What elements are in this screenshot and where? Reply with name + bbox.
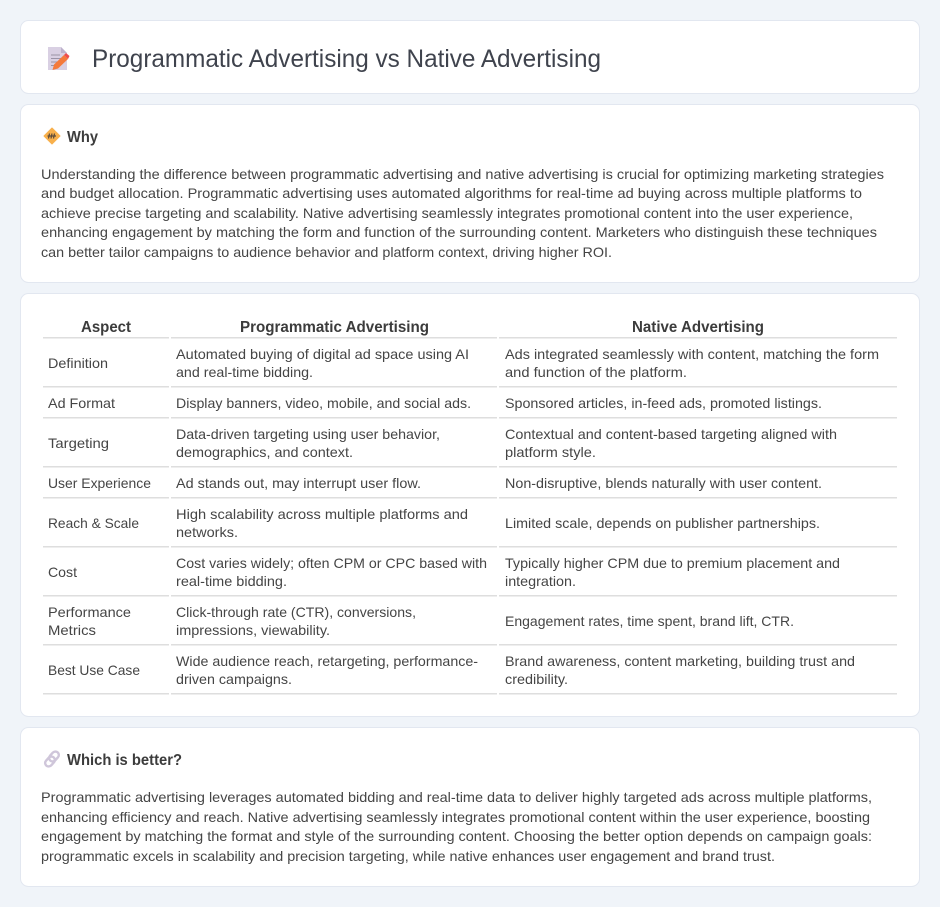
row: definition: Ads integrated seamlessly with content, matching the form [505, 346, 879, 362]
row: cost: Cost [48, 564, 77, 580]
row: user experience: User Experience [48, 475, 151, 491]
text block: why [41, 166, 884, 260]
row: ad format [43, 395, 897, 418]
row: performance metrics: Engagement rates, time spent, brand lift, CTR. [505, 613, 794, 629]
row: best use case: credibility. [505, 671, 568, 687]
row: performance metrics: Metrics [48, 622, 96, 638]
row: targeting [43, 426, 897, 468]
icon: link [44, 750, 60, 768]
heading: which is better: Which is better? [67, 752, 182, 769]
text block: which is better: engagement by matching the format and style of the surrounding content. Choosing the better option depends on campaign goals: [41, 828, 872, 844]
table header: Programmatic Advertising [240, 319, 429, 336]
text block: which is better: programmatic excels in scalability and precision targeting, while native enhances user engagement and brand trust. [41, 848, 775, 864]
panel: why [20, 104, 920, 282]
text block: why: Understanding the difference between programmatic advertising and native advertising is crucial for optimizing marketing strategies [41, 166, 884, 182]
icon: document with pencil [48, 47, 70, 70]
row: targeting: Data-driven targeting using user behavior, [176, 426, 440, 442]
panel: title [20, 20, 920, 94]
heading: why: Why [67, 129, 98, 146]
row: reach and scale: Reach & Scale [48, 515, 139, 531]
row: best use case: Brand awareness, content marketing, building trust and [505, 653, 855, 669]
row: user experience: Non-disruptive, blends naturally with user content. [505, 475, 822, 491]
text block: why: and budget allocation. Programmatic advertising uses automated algorithms for real-time ad buying across multiple platforms to [41, 185, 862, 201]
table header: Aspect [81, 319, 132, 336]
row: reach and scale: networks. [176, 524, 238, 540]
row: ad format: Display banners, video, mobile, and social ads. [176, 395, 471, 411]
row: cost [43, 555, 897, 596]
row: ad format: Ad Format [48, 395, 115, 411]
row: cost: Typically higher CPM due to premium placement and [505, 555, 840, 571]
row: best use case: driven campaigns. [176, 671, 292, 687]
row: reach and scale: Limited scale, depends on publisher partnerships. [505, 515, 820, 531]
row: performance metrics [43, 604, 897, 646]
row: cost: Cost varies widely; often CPM or CPC based with [176, 555, 487, 571]
row: definition: and function of the platform. [505, 364, 687, 380]
row: definition: Definition [48, 355, 108, 371]
row: reach and scale [43, 506, 897, 548]
title text: Programmatic Advertising vs Native Advertising [92, 45, 601, 73]
table header [43, 319, 897, 338]
row: targeting: Targeting [48, 435, 109, 451]
text block: which is better [41, 789, 872, 864]
row: ad format: Sponsored articles, in-feed ads, promoted listings. [505, 395, 822, 411]
row: targeting: demographics, and context. [176, 444, 353, 460]
panel: which is better [20, 728, 920, 886]
row: performance metrics: Performance [48, 604, 131, 620]
row: best use case: Best Use Case [48, 662, 140, 678]
row: cost: integration. [505, 573, 576, 589]
row: cost: real-time bidding. [176, 573, 287, 589]
row: performance metrics: impressions, viewability. [176, 622, 330, 638]
text block: why: can better tailor campaigns to audience behavior and platform context, driving higher ROI. [41, 244, 612, 260]
row: performance metrics: Click-through rate (CTR), conversions, [176, 604, 416, 620]
row: best use case [43, 653, 897, 694]
row: definition: Automated buying of digital ad space using AI [176, 346, 469, 362]
text block: which is better: Programmatic advertising leverages automated bidding and real-time data to deliver highly targeted ads across multiple platforms, [41, 789, 872, 805]
row: targeting: Contextual and content-based targeting aligned with [505, 426, 837, 442]
row: definition: and real-time bidding. [176, 364, 313, 380]
row: definition [43, 346, 897, 388]
panel: comparison table [20, 294, 920, 716]
row: reach and scale: High scalability across multiple platforms and [176, 506, 468, 522]
row: targeting: platform style. [505, 444, 596, 460]
text block: why: enhancing engagement by matching the form and function of the surrounding content. Marketers who distinguish these techniques [41, 224, 877, 240]
text block: why: achieve precise targeting and scalability. Native advertising seamlessly integrates promotional content into the user experience, [41, 205, 853, 221]
row: user experience: Ad stands out, may interrupt user flow. [176, 475, 421, 491]
row: best use case: Wide audience reach, retargeting, performance- [176, 653, 478, 669]
row: user experience [43, 475, 897, 498]
table header: Native Advertising [632, 319, 764, 336]
icon: diamond sign [44, 128, 60, 144]
text block: which is better: enhancing efficiency and reach. Native advertising seamlessly integrates promotional content within the user experience, boosting [41, 809, 870, 825]
